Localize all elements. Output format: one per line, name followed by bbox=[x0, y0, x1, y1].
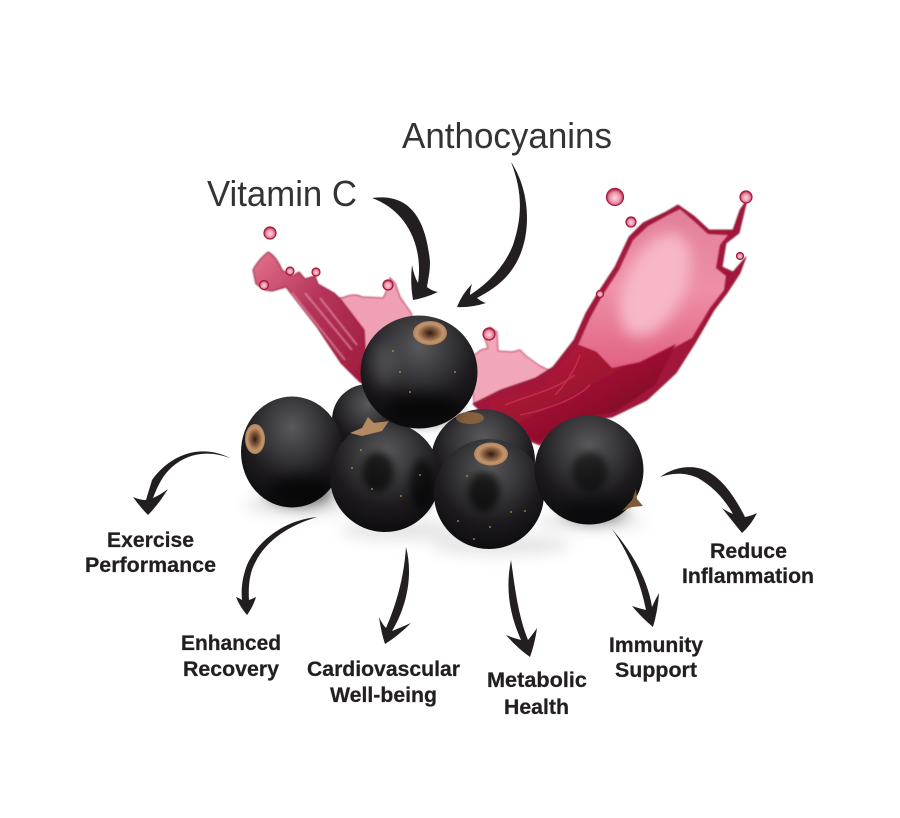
right splash body bbox=[473, 200, 747, 445]
label: Enhanced Recovery: Recovery bbox=[183, 658, 279, 681]
label: Enhanced Recovery: Enhanced bbox=[181, 632, 281, 655]
label: Immunity Support: Support bbox=[615, 659, 697, 682]
label: Exercise Performance: Performance bbox=[85, 554, 216, 577]
berry: right bbox=[534, 416, 644, 524]
berry: left bbox=[241, 396, 343, 508]
label: Cardiovascular Well-being bbox=[307, 658, 460, 707]
right splash highlight bbox=[605, 222, 705, 348]
berry: front middle bbox=[434, 439, 544, 549]
arrow: Metabolic Health bbox=[506, 560, 537, 657]
berry: back middle bbox=[431, 409, 535, 513]
label: Enhanced Recovery bbox=[181, 632, 281, 681]
right splash dark lower bbox=[490, 344, 676, 442]
left splash red band bbox=[253, 252, 368, 385]
berry: back left bbox=[332, 384, 404, 456]
label: Reduce Inflammation bbox=[682, 540, 814, 588]
blackcurrant pile bbox=[241, 316, 644, 549]
arrow: Cardiovascular Well-being bbox=[379, 547, 411, 644]
berry: front left bbox=[330, 417, 440, 532]
arrow: Anthocyanins bbox=[457, 162, 527, 307]
arrow: Vitamin C bbox=[372, 197, 438, 300]
label: Metabolic Health: Health bbox=[504, 696, 569, 719]
berry: top bbox=[360, 316, 478, 428]
arrow: Immunity Support bbox=[612, 529, 659, 627]
splash droplets bbox=[260, 188, 752, 340]
label: Metabolic Health bbox=[487, 669, 587, 719]
middle pink splash bbox=[470, 327, 553, 404]
arrow: Enhanced Recovery bbox=[236, 517, 317, 615]
right splash light sheet bbox=[578, 209, 728, 370]
berry shadows bbox=[245, 495, 645, 555]
label: Immunity Support: Immunity bbox=[609, 634, 703, 657]
arrow: Exercise Performance bbox=[133, 451, 230, 515]
label: Reduce Inflammation: Inflammation bbox=[682, 565, 814, 588]
label: Immunity Support bbox=[609, 634, 703, 682]
label: Exercise Performance: Exercise bbox=[107, 529, 194, 552]
arrow: Reduce Inflammation bbox=[660, 467, 757, 533]
label: Reduce Inflammation: Reduce bbox=[710, 540, 787, 563]
label: Cardiovascular Well-being: Cardiovascular bbox=[307, 658, 460, 681]
label: Exercise Performance bbox=[85, 529, 216, 577]
juice splash bbox=[253, 188, 752, 445]
label: Vitamin C: Vitamin C bbox=[207, 173, 357, 214]
label: Metabolic Health: Metabolic bbox=[487, 669, 587, 692]
left splash streaks bbox=[292, 293, 357, 360]
right splash streaks bbox=[505, 355, 590, 415]
label: Cardiovascular Well-being: Well-being bbox=[330, 684, 437, 707]
left splash pink sheet bbox=[330, 278, 420, 360]
label: Anthocyanins: Anthocyanins bbox=[402, 115, 612, 156]
